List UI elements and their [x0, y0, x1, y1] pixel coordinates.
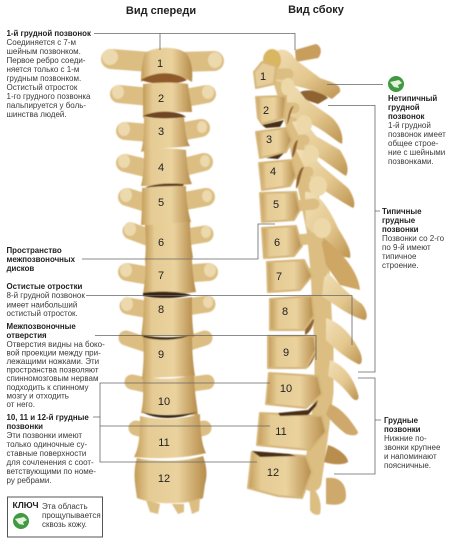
vertebra numbers side: 12: [267, 467, 279, 479]
vertebra numbers front: 5: [158, 197, 164, 209]
text: thoracic vertebrae: и напоминают: [384, 452, 437, 461]
vertebra numbers front: 12: [158, 473, 170, 485]
text: intervertebral foramina: вой проекции между при-: [6, 348, 101, 358]
text: intervertebral disc space: межпозвоночных: [6, 255, 76, 264]
facet highlights: [263, 49, 331, 238]
vertebra numbers front: 4: [158, 162, 164, 174]
vertebra numbers side: 9: [283, 347, 289, 359]
vertebra 4 front: [141, 148, 192, 190]
vertebra 1 front: [141, 48, 192, 84]
vertebra numbers front: 3: [158, 126, 164, 138]
leader lines: [82, 34, 383, 474]
text: spinous processes: имеет наибольший: [6, 300, 77, 310]
text: intervertebral disc space: дисков: [6, 264, 34, 273]
vertebra numbers front: 8: [158, 304, 164, 316]
text: first thoracic vertebra: Первое ребро соеди-: [6, 56, 86, 65]
vertebra 12 front: [135, 456, 206, 514]
text: spinous processes: Остистые отростки: [6, 282, 83, 291]
side view spine: [248, 44, 367, 515]
vertebra numbers front: 2: [158, 93, 164, 105]
transverse process tips: [102, 49, 222, 311]
title: side view: Вид сбоку: [288, 4, 345, 16]
text: intervertebral foramina: Межпозвоночные: [6, 322, 76, 331]
text: first thoracic vertebra: няется только с 1-м: [6, 65, 79, 74]
key box: [8, 496, 105, 537]
text: typical thoracic vertebrae: грудные: [382, 216, 416, 225]
text: vertebrae 10 11 12: ру ребрами.: [6, 476, 52, 485]
dark disc gaps: [252, 120, 318, 457]
vertebra numbers front: [157, 58, 170, 485]
vertebra numbers front: 11: [158, 437, 170, 449]
vertebra numbers front: 7: [158, 270, 164, 282]
vertebra 10 front: [141, 374, 198, 418]
text: intervertebral foramina: от него.: [6, 400, 35, 409]
text: typical thoracic vertebrae: строение.: [382, 261, 419, 270]
vertebra 5 front: [141, 186, 191, 225]
text: first thoracic vertebra: шинства людей.: [6, 110, 67, 119]
text: typical thoracic vertebrae: типичное: [382, 252, 417, 261]
vertebra numbers front: 1: [157, 58, 163, 70]
vertebra 9 front: [142, 335, 195, 379]
vertebra numbers side: [260, 71, 292, 479]
text: atypical thoracic vertebra: общее строе-: [388, 139, 439, 148]
text: atypical thoracic vertebra: позвонками.: [388, 157, 434, 166]
vertebra numbers side: 5: [273, 199, 279, 211]
text: atypical thoracic vertebra: грудной: [388, 103, 420, 112]
text: first thoracic vertebra: 1-й грудной позвонок: [6, 29, 91, 38]
text: vertebrae 10 11 12: позвонки: [6, 422, 43, 431]
vertebra 2 front: [143, 82, 192, 118]
text: thoracic vertebrae: позвонки: [384, 425, 421, 434]
text: typical thoracic vertebrae: Позвонки со 2-го: [382, 234, 445, 243]
vertebra 6 front: [145, 222, 193, 261]
icon: palpation key: [13, 513, 29, 529]
text: atypical thoracic vertebra: ние с шейными: [388, 148, 445, 157]
text: first thoracic vertebra: грудным позвонком.: [6, 74, 81, 83]
text: atypical thoracic vertebra: Нетипичный: [388, 94, 437, 103]
text: intervertebral foramina: отверстия: [6, 331, 47, 340]
shadows: [287, 106, 316, 368]
vertebra 8 front: [141, 297, 194, 337]
key box: прощупывается: [42, 511, 101, 520]
text: intervertebral disc space: Пространство: [6, 246, 62, 255]
text: typical thoracic vertebrae: по 9-й имеют: [382, 243, 431, 252]
key box: сквозь кожу.: [42, 520, 87, 529]
vertebra numbers side: 4: [270, 166, 276, 178]
text: first thoracic vertebra: шейным позвонком.: [6, 47, 81, 56]
text: intervertebral foramina: мозгу и отходить: [6, 392, 69, 400]
icon: palpation side: [388, 76, 404, 92]
text: atypical thoracic vertebra: 1-й грудной: [388, 121, 431, 130]
text: intervertebral foramina: подходить к спинному: [6, 383, 89, 392]
text: first thoracic vertebra: пальпируется у боль-: [6, 101, 86, 110]
vertebra numbers side: 7: [276, 271, 282, 283]
text: intervertebral foramina: лежащими ножками. Эти: [6, 357, 99, 366]
vertebra numbers front: 9: [158, 349, 164, 361]
text: typical thoracic vertebrae: позвонки: [382, 225, 419, 234]
key box: Эта область: [42, 502, 88, 511]
text: vertebrae 10 11 12: для сочленения с соот-: [6, 458, 94, 467]
vertebra numbers side: 3: [266, 134, 272, 146]
text: atypical thoracic vertebra: позвонок имеет: [388, 130, 446, 139]
spinous processes: [270, 44, 367, 515]
title: front view: Вид спереди: [126, 5, 196, 17]
text: intervertebral foramina: Отверстия видны на боко-: [6, 340, 105, 349]
text: vertebrae 10 11 12: только одиночные су-: [6, 440, 88, 449]
vertebra numbers front: 10: [158, 396, 170, 408]
text: vertebrae 10 11 12: ставные поверхности: [6, 449, 86, 458]
vertebra numbers front: 6: [158, 237, 164, 249]
vertebra 7 front: [143, 258, 196, 298]
text: intervertebral foramina: пространства позволяют: [6, 366, 99, 374]
vertebra numbers side: 2: [263, 105, 269, 117]
vertebra numbers side: 11: [275, 426, 287, 438]
pedicles: [274, 74, 326, 472]
vertebra 3 front: [141, 117, 190, 152]
text: vertebrae 10 11 12: ветствующими по номе-: [6, 467, 96, 476]
text: first thoracic vertebra: 1-го грудного позвонка: [6, 92, 91, 101]
text: spinous processes: 8-й грудной позвонок: [6, 291, 85, 300]
text: spinous processes: остистый отросток.: [6, 309, 78, 318]
text: intervertebral foramina: спинномозговым нервам: [6, 374, 98, 383]
text: thoracic vertebrae: Нижние по-: [384, 434, 427, 443]
text: vertebrae 10 11 12: Эти позвонки имеют: [6, 431, 82, 440]
articular column: [280, 72, 324, 482]
text: typical thoracic vertebrae: Типичные: [382, 207, 422, 216]
key box: КЛЮЧ: [12, 500, 39, 510]
text: thoracic vertebrae: Грудные: [384, 416, 419, 425]
text: atypical thoracic vertebra: позвонок: [388, 112, 425, 121]
side vertebra bodies: [248, 62, 326, 498]
text: first thoracic vertebra: Соединяется с 7-м: [6, 38, 76, 47]
vertebra 11 front: [134, 414, 206, 458]
front view spine: [102, 48, 222, 514]
vertebra numbers side: 10: [280, 383, 292, 395]
text: thoracic vertebrae: звонки крупнее: [384, 443, 441, 452]
transverse processes front: [111, 59, 214, 432]
text: thoracic vertebrae: поясничные.: [384, 461, 431, 470]
vertebra numbers side: 8: [282, 306, 288, 318]
text: first thoracic vertebra: Остистый отросток: [6, 83, 78, 92]
vertebra numbers side: 1: [260, 71, 266, 83]
text: vertebrae 10 11 12: 10, 11 и 12-й грудные: [6, 413, 89, 422]
vertebra numbers side: 6: [274, 237, 280, 249]
